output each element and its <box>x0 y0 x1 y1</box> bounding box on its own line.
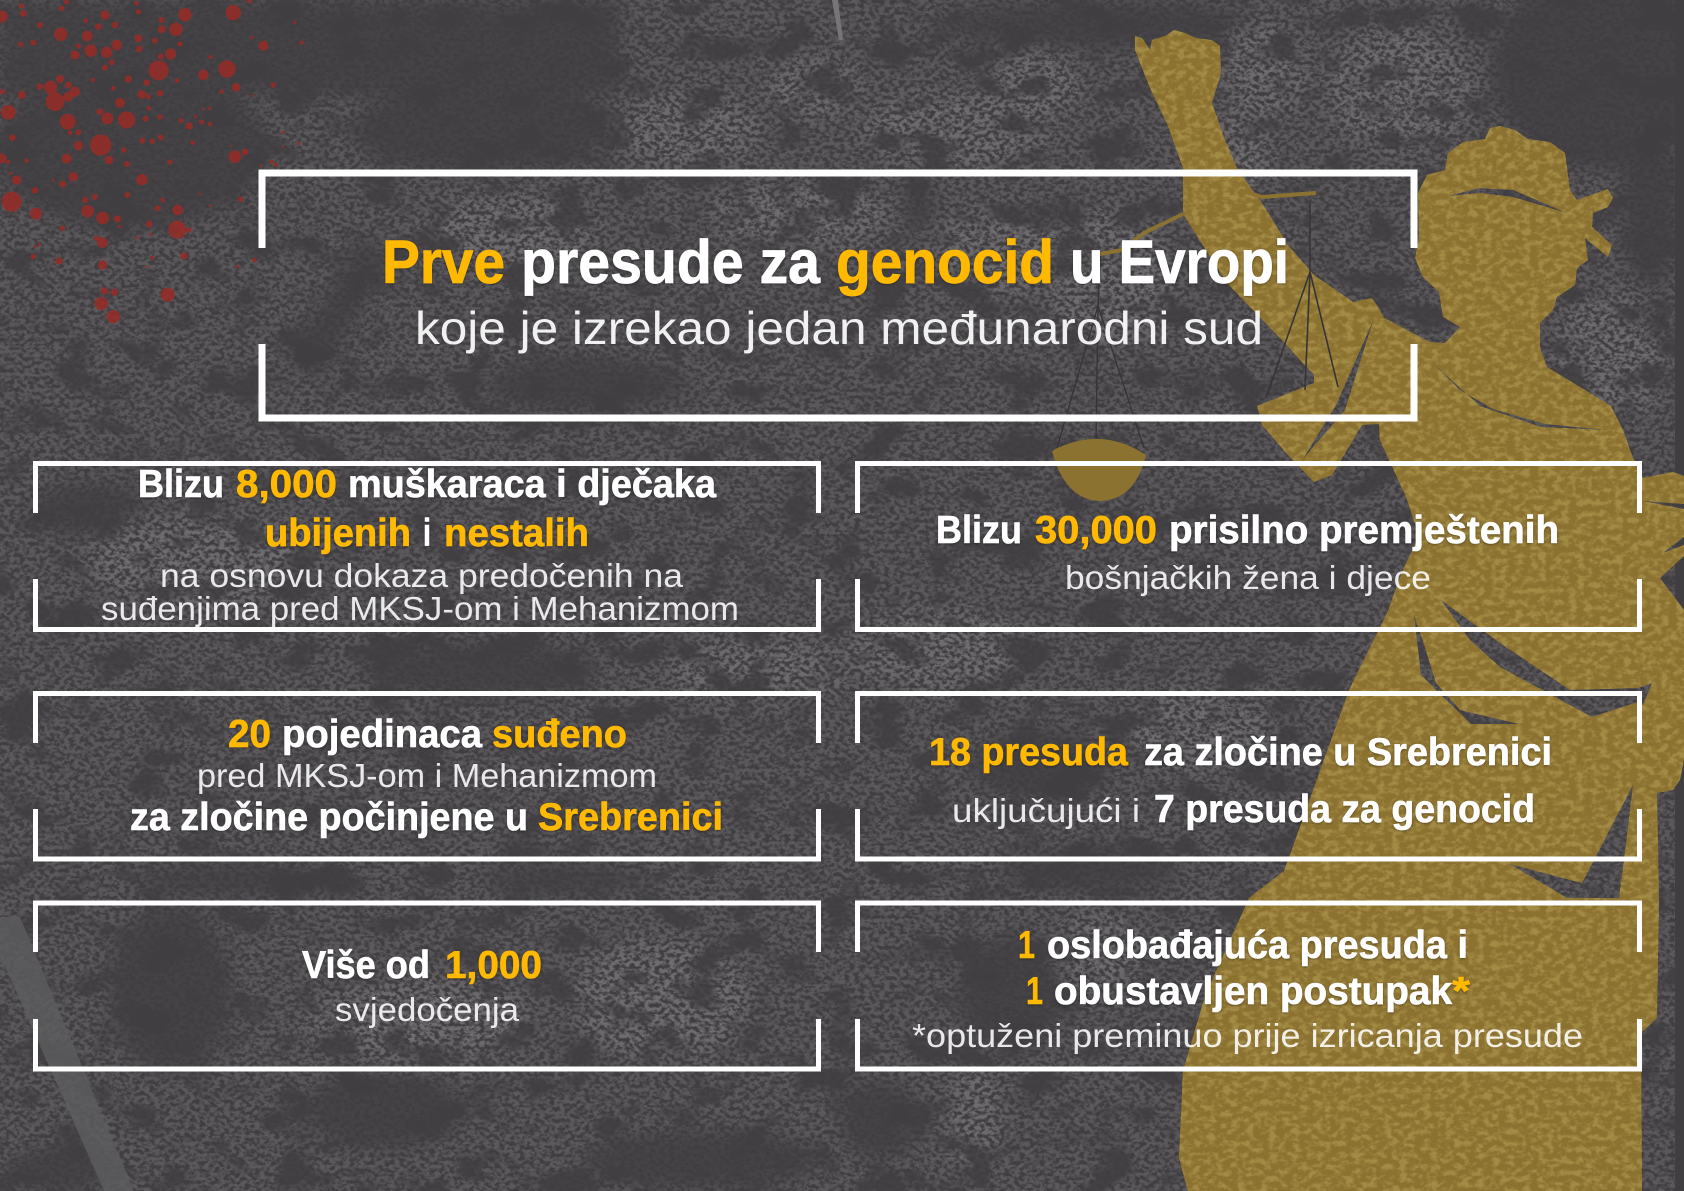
title heading: u Evropi <box>1070 228 1289 296</box>
closing headline text: za zločine počinjene u <box>130 796 528 839</box>
headline text: nestalih <box>444 512 589 555</box>
panel: victims killed and missing: suđenjima pred MKSJ-om i Mehanizmom <box>101 590 739 627</box>
headline text <box>138 463 716 555</box>
panel: forcibly displaced <box>858 464 1640 630</box>
statue body <box>1100 0 1684 1191</box>
frame <box>858 694 1640 859</box>
headline text: obustavljen postupak <box>1054 970 1452 1013</box>
headline text: suđeno <box>492 713 627 756</box>
headline text: 1 <box>1026 970 1043 1013</box>
closing headline text: Srebrenici <box>538 796 723 839</box>
frame <box>858 464 1640 630</box>
headline text: za zločine u Srebrenici <box>1144 731 1552 774</box>
blood splatter <box>0 0 304 323</box>
headline text <box>1018 924 1471 1013</box>
title frame <box>262 173 1414 418</box>
headline text <box>929 731 1552 774</box>
closing headline text <box>130 796 723 839</box>
headline text: 30,000 <box>1035 509 1157 552</box>
statue of Lady Justice silhouette <box>1052 0 1684 1191</box>
detail text: uključujući i <box>952 792 1140 829</box>
title heading: presude za <box>521 228 821 296</box>
genocid verdict count: 7 presuda za genocid <box>1154 788 1535 831</box>
headline text: muškaraca i dječaka <box>348 463 716 506</box>
headline text: Blizu <box>138 463 224 506</box>
headline text: oslobađajuća presuda i <box>1047 924 1468 967</box>
headline text: prisilno premještenih <box>1169 509 1559 552</box>
icon: scale of justice, right beam and strings <box>1240 190 1338 398</box>
headline text: ubijenih <box>265 512 411 555</box>
panel: verdicts <box>858 694 1640 859</box>
frame <box>36 464 818 630</box>
headline text: Više od <box>302 944 430 987</box>
headline text: 1,000 <box>445 944 542 987</box>
headline text <box>302 944 542 987</box>
headline text: pojedinaca <box>282 713 482 756</box>
footnote text: *optuženi preminuo prije izricanja presude <box>912 1017 1583 1054</box>
detail text: na osnovu dokaza predočenih na <box>160 557 684 594</box>
headline text: 8,000 <box>236 463 337 506</box>
headline text <box>228 713 627 756</box>
frame <box>36 903 818 1069</box>
title subheading: koje je izrekao jedan međunarodni sud <box>415 302 1263 354</box>
title heading <box>382 228 1289 296</box>
headline text: 1 <box>1018 924 1035 967</box>
panel: victims killed and missing <box>36 463 818 630</box>
title panel <box>262 173 1414 418</box>
panel: testimonies <box>36 903 818 1069</box>
panel: individuals tried <box>36 694 818 859</box>
title heading: genocid <box>836 228 1054 296</box>
headline text: Blizu <box>936 509 1022 552</box>
headline text: i <box>423 512 431 555</box>
icon: scale of justice, left pan and strings <box>1052 214 1183 501</box>
headline text: 18 presuda <box>929 731 1128 774</box>
detail text: pred MKSJ-om i Mehanizmom <box>197 757 657 794</box>
headline text: * <box>1452 970 1471 1013</box>
panel: acquittal and terminated proceedings <box>858 903 1640 1069</box>
detail text: svjedočenja <box>335 991 520 1028</box>
detail text: bošnjačkih žena i djece <box>1065 559 1431 596</box>
frame <box>858 903 1640 1069</box>
headline text: 20 <box>228 713 271 756</box>
title heading: Prve <box>382 228 505 296</box>
frame <box>36 694 818 859</box>
headline text <box>936 509 1559 552</box>
